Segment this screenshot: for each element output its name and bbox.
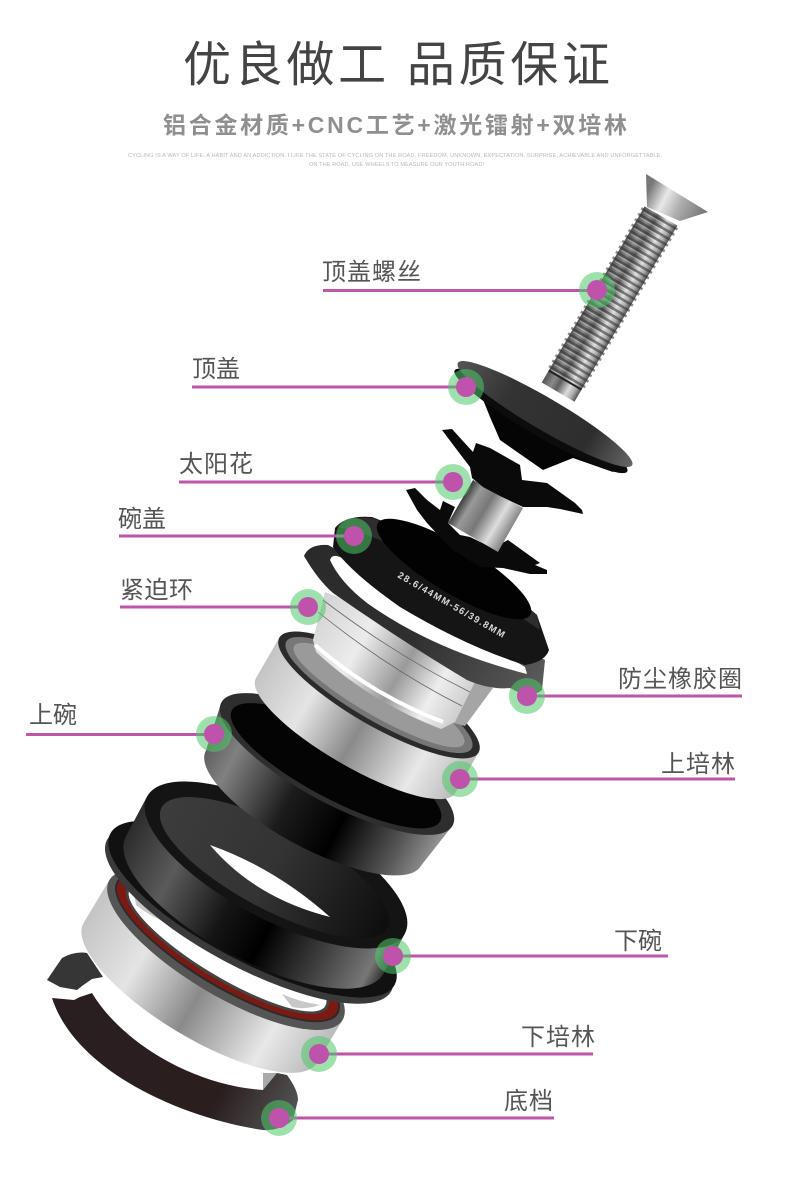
callout: 下培林	[301, 1024, 595, 1072]
callout: 上培林: 上培林	[661, 751, 735, 778]
callout: 碗盖	[118, 506, 372, 554]
part: silver compression ring	[313, 592, 493, 729]
part: star nut	[406, 429, 583, 574]
part: lower cup	[83, 742, 444, 1037]
part: top cap	[446, 349, 640, 485]
english tagline: ON THE ROAD, USE WHEELS TO MEASURE OUR YOUTH ROAD!	[309, 162, 484, 168]
english tagline: CYCLING IS A WAY OF LIFE, A HABIT AND AN ADDICTION. I LIKE THE STATE OF CYCLING ON THE ROAD, FREEDOM, UNKNOWN, EXPECTATION, SURPRISE, ACHIEVABLE AND UNFORGETTABLE.	[128, 153, 662, 159]
lower bearing inner wall	[134, 893, 320, 1008]
subtitle: 铝合金材质+CNC工艺+激光镭射+双培林	[163, 112, 627, 138]
callout: 顶盖	[192, 356, 484, 405]
part: dust seal	[304, 545, 545, 695]
lower cup opening	[210, 845, 330, 917]
part: top cap screw	[542, 174, 708, 402]
part: headset cover	[333, 503, 549, 665]
callout: 底档	[261, 1088, 554, 1136]
callout: 紧迫环: 紧迫环	[120, 577, 193, 604]
exploded headset illustration	[47, 174, 708, 1130]
callout: 上碗: 上碗	[29, 702, 77, 729]
callout: 顶盖螺丝: 顶盖螺丝	[322, 259, 421, 286]
cover size marking: 28.6/44MM-56/39.8MM	[396, 570, 507, 641]
title: 优良做工 品质保证	[183, 39, 610, 92]
callout: 紧迫环	[120, 577, 326, 625]
callout: 下碗: 下碗	[614, 928, 662, 955]
english tagline	[128, 153, 662, 168]
callout: 上碗	[26, 702, 232, 752]
callout: 太阳花	[179, 451, 471, 500]
part: bottom compression ring	[47, 953, 298, 1130]
callout: 防尘橡胶圈: 防尘橡胶圈	[618, 666, 742, 693]
callout: 下培林: 下培林	[521, 1024, 595, 1051]
callout: 上培林	[442, 751, 735, 797]
callout: 太阳花: 太阳花	[179, 451, 253, 478]
callout: 碗盖: 碗盖	[118, 506, 166, 533]
callout: 下碗	[375, 928, 668, 974]
callout: 顶盖螺丝	[322, 259, 615, 308]
part: lower bearing	[60, 841, 366, 1101]
part: upper cup	[179, 667, 471, 905]
callout: 防尘橡胶圈	[509, 666, 742, 714]
callout: 底档: 底档	[504, 1088, 553, 1115]
part: upper bearing	[240, 611, 494, 820]
callout: 顶盖: 顶盖	[192, 356, 240, 383]
